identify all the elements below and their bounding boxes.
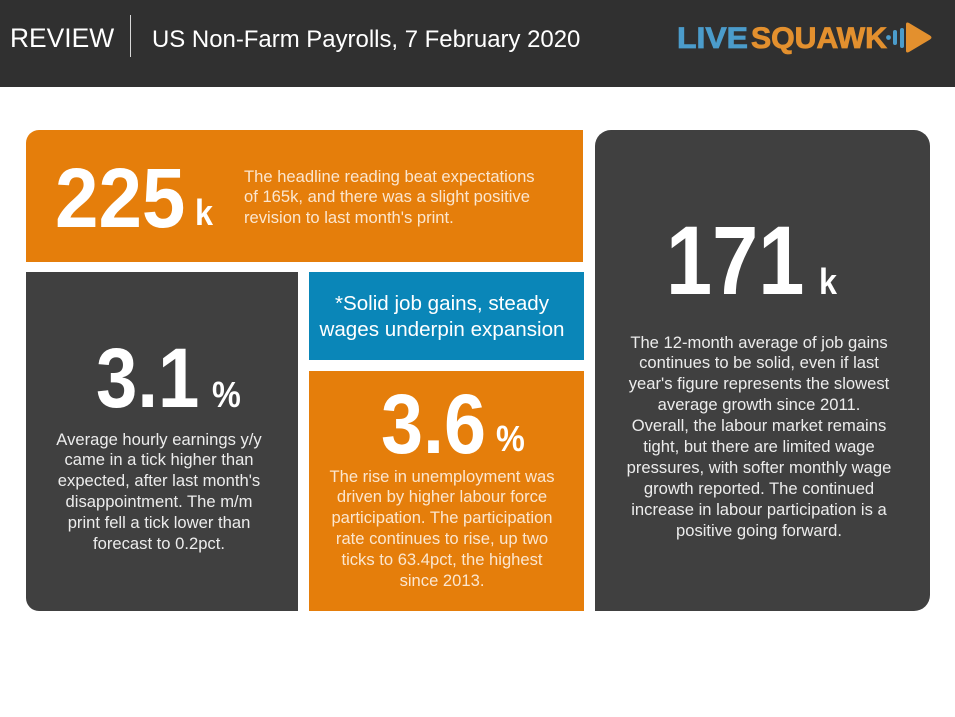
panel: 225k headline	[26, 130, 583, 262]
text: average description: average growth since 2011.	[658, 395, 860, 414]
text: unemployment description: The rise in unemployment was	[329, 466, 555, 486]
logo: LiveSquawk	[677, 22, 932, 55]
logo: LiveSquawk: LIVE	[677, 22, 748, 55]
text: average description: positive going forward.	[676, 521, 842, 540]
text: headline description: of 165k, and there was a slight positive	[244, 187, 530, 206]
text: earnings description: print fell a tick lower than	[68, 513, 250, 532]
text: average description: tight, but there are limited wage	[643, 437, 875, 456]
text: earnings description: came in a tick higher than	[64, 450, 254, 469]
header divider	[130, 15, 131, 57]
stat: 3.1%: %	[212, 374, 241, 414]
text: headline description	[244, 166, 535, 227]
text: unemployment description: rate continues to rise, up two	[336, 529, 548, 548]
stat: 225k: k	[195, 192, 213, 233]
header label: review: REVIEW	[10, 23, 114, 53]
panel: 3.6% unemployment	[309, 371, 584, 611]
logo: LiveSquawk: SQUAWK	[751, 22, 888, 55]
text: quote: *Solid job gains, steady	[335, 292, 549, 315]
stat: 3.1%: 3.1	[96, 331, 199, 425]
text: unemployment description	[329, 466, 555, 590]
text: quote: wages underpin expansion	[319, 318, 564, 341]
text: headline description: revision to last month's print.	[244, 208, 454, 227]
text: average description: pressures, with softer monthly wage	[627, 458, 891, 477]
text: headline description: The headline reading beat expectations	[244, 166, 535, 186]
text: earnings description: disappointment. The m/m	[66, 492, 252, 511]
text: average description: continues to be solid, even if last	[639, 353, 879, 372]
panel: 171k average	[595, 130, 930, 611]
stat: 225k: 225	[55, 151, 185, 245]
text: earnings description: expected, after last month's	[58, 471, 260, 490]
text: unemployment description: driven by higher labour force	[337, 487, 547, 506]
text: earnings description: forecast to 0.2pct.	[93, 534, 225, 553]
header title: US Non-Farm Payrolls, 7 February 2020	[152, 26, 580, 53]
stat: 171k: 171	[666, 206, 804, 315]
text: unemployment description: participation. The participation	[331, 508, 553, 527]
text: average description: Overall, the labour market remains	[632, 416, 886, 435]
stat: 3.6%: %	[496, 418, 525, 458]
text: average description	[627, 332, 891, 540]
text: quote	[319, 292, 564, 341]
text: earnings description: Average hourly earnings y/y	[56, 430, 262, 448]
text: unemployment description: since 2013.	[400, 571, 484, 590]
text: earnings description	[56, 430, 262, 553]
text: average description: The 12-month average of job gains	[630, 332, 888, 352]
text: average description: increase in labour participation is a	[631, 500, 887, 519]
stat: 171k: k	[818, 260, 837, 302]
text: average description: growth reported. The continued	[644, 479, 874, 498]
stat: 3.6%: 3.6	[381, 377, 486, 471]
header bar	[0, 0, 955, 87]
text: unemployment description: ticks to 63.4pct, the highest	[341, 550, 543, 569]
panel: quote banner	[309, 272, 584, 360]
panel: 3.1% earnings	[26, 272, 298, 611]
text: average description: year's figure represents the slowest	[629, 374, 889, 393]
